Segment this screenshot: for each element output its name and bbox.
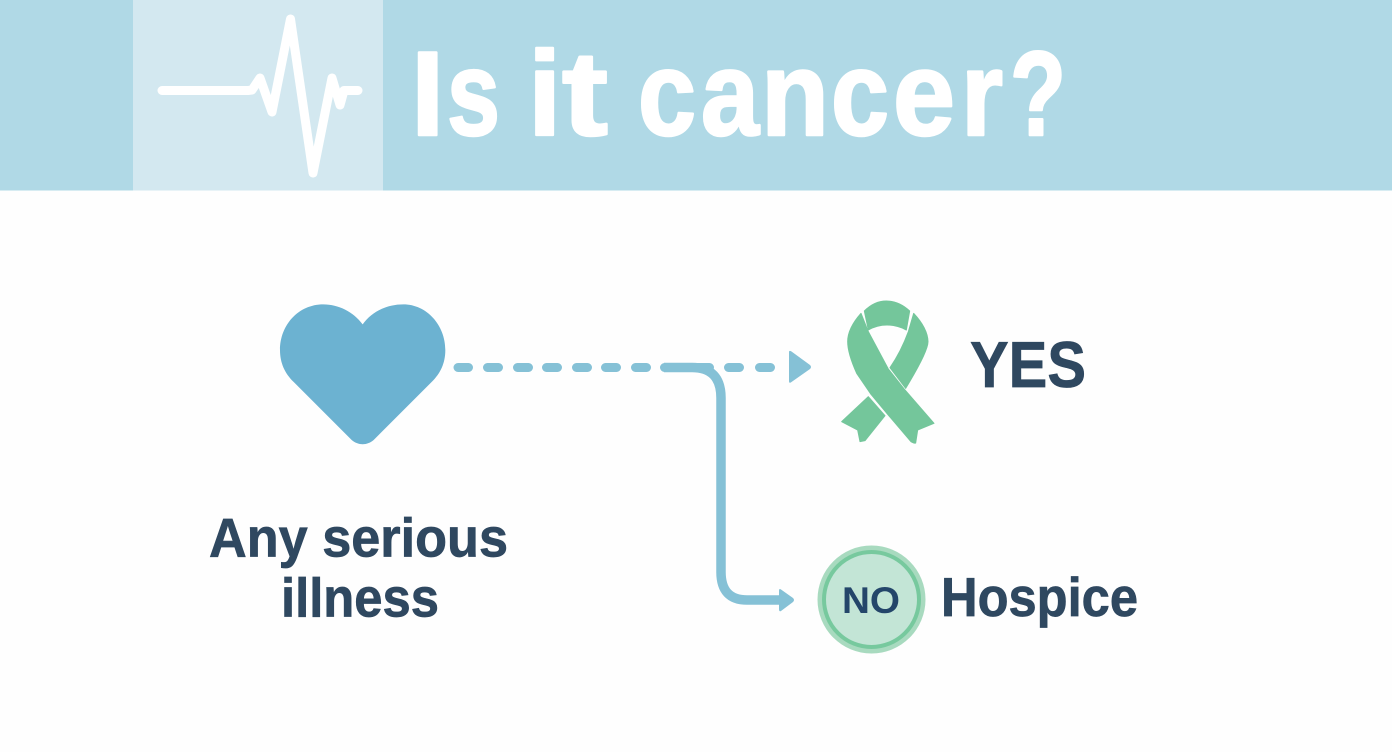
label: hospice: Hospice	[941, 566, 1138, 628]
title: t	[562, 27, 608, 161]
label: any serious illness: illness	[281, 566, 439, 628]
title: r	[961, 27, 1003, 161]
icon: no badge	[818, 546, 926, 654]
label: any serious illness: Any serious	[209, 506, 508, 568]
icon: heart	[280, 304, 445, 444]
title: i	[528, 27, 561, 161]
title: I	[411, 27, 444, 161]
title: c	[831, 27, 889, 161]
title: s	[447, 27, 500, 161]
title: n	[761, 27, 829, 161]
header banner	[0, 0, 1392, 190]
arrow: solid to no	[664, 368, 794, 611]
title: a	[701, 27, 760, 161]
icon: no badge: NO	[842, 580, 900, 621]
label: any serious illness	[209, 506, 508, 628]
label: yes: YES	[970, 328, 1086, 401]
title: e	[893, 27, 955, 161]
arrow: dashed to yes	[458, 351, 811, 383]
title: c	[638, 27, 696, 161]
icon: green ribbon	[842, 301, 934, 443]
icon: heartbeat panel	[133, 0, 383, 190]
title: ?	[1010, 27, 1066, 161]
